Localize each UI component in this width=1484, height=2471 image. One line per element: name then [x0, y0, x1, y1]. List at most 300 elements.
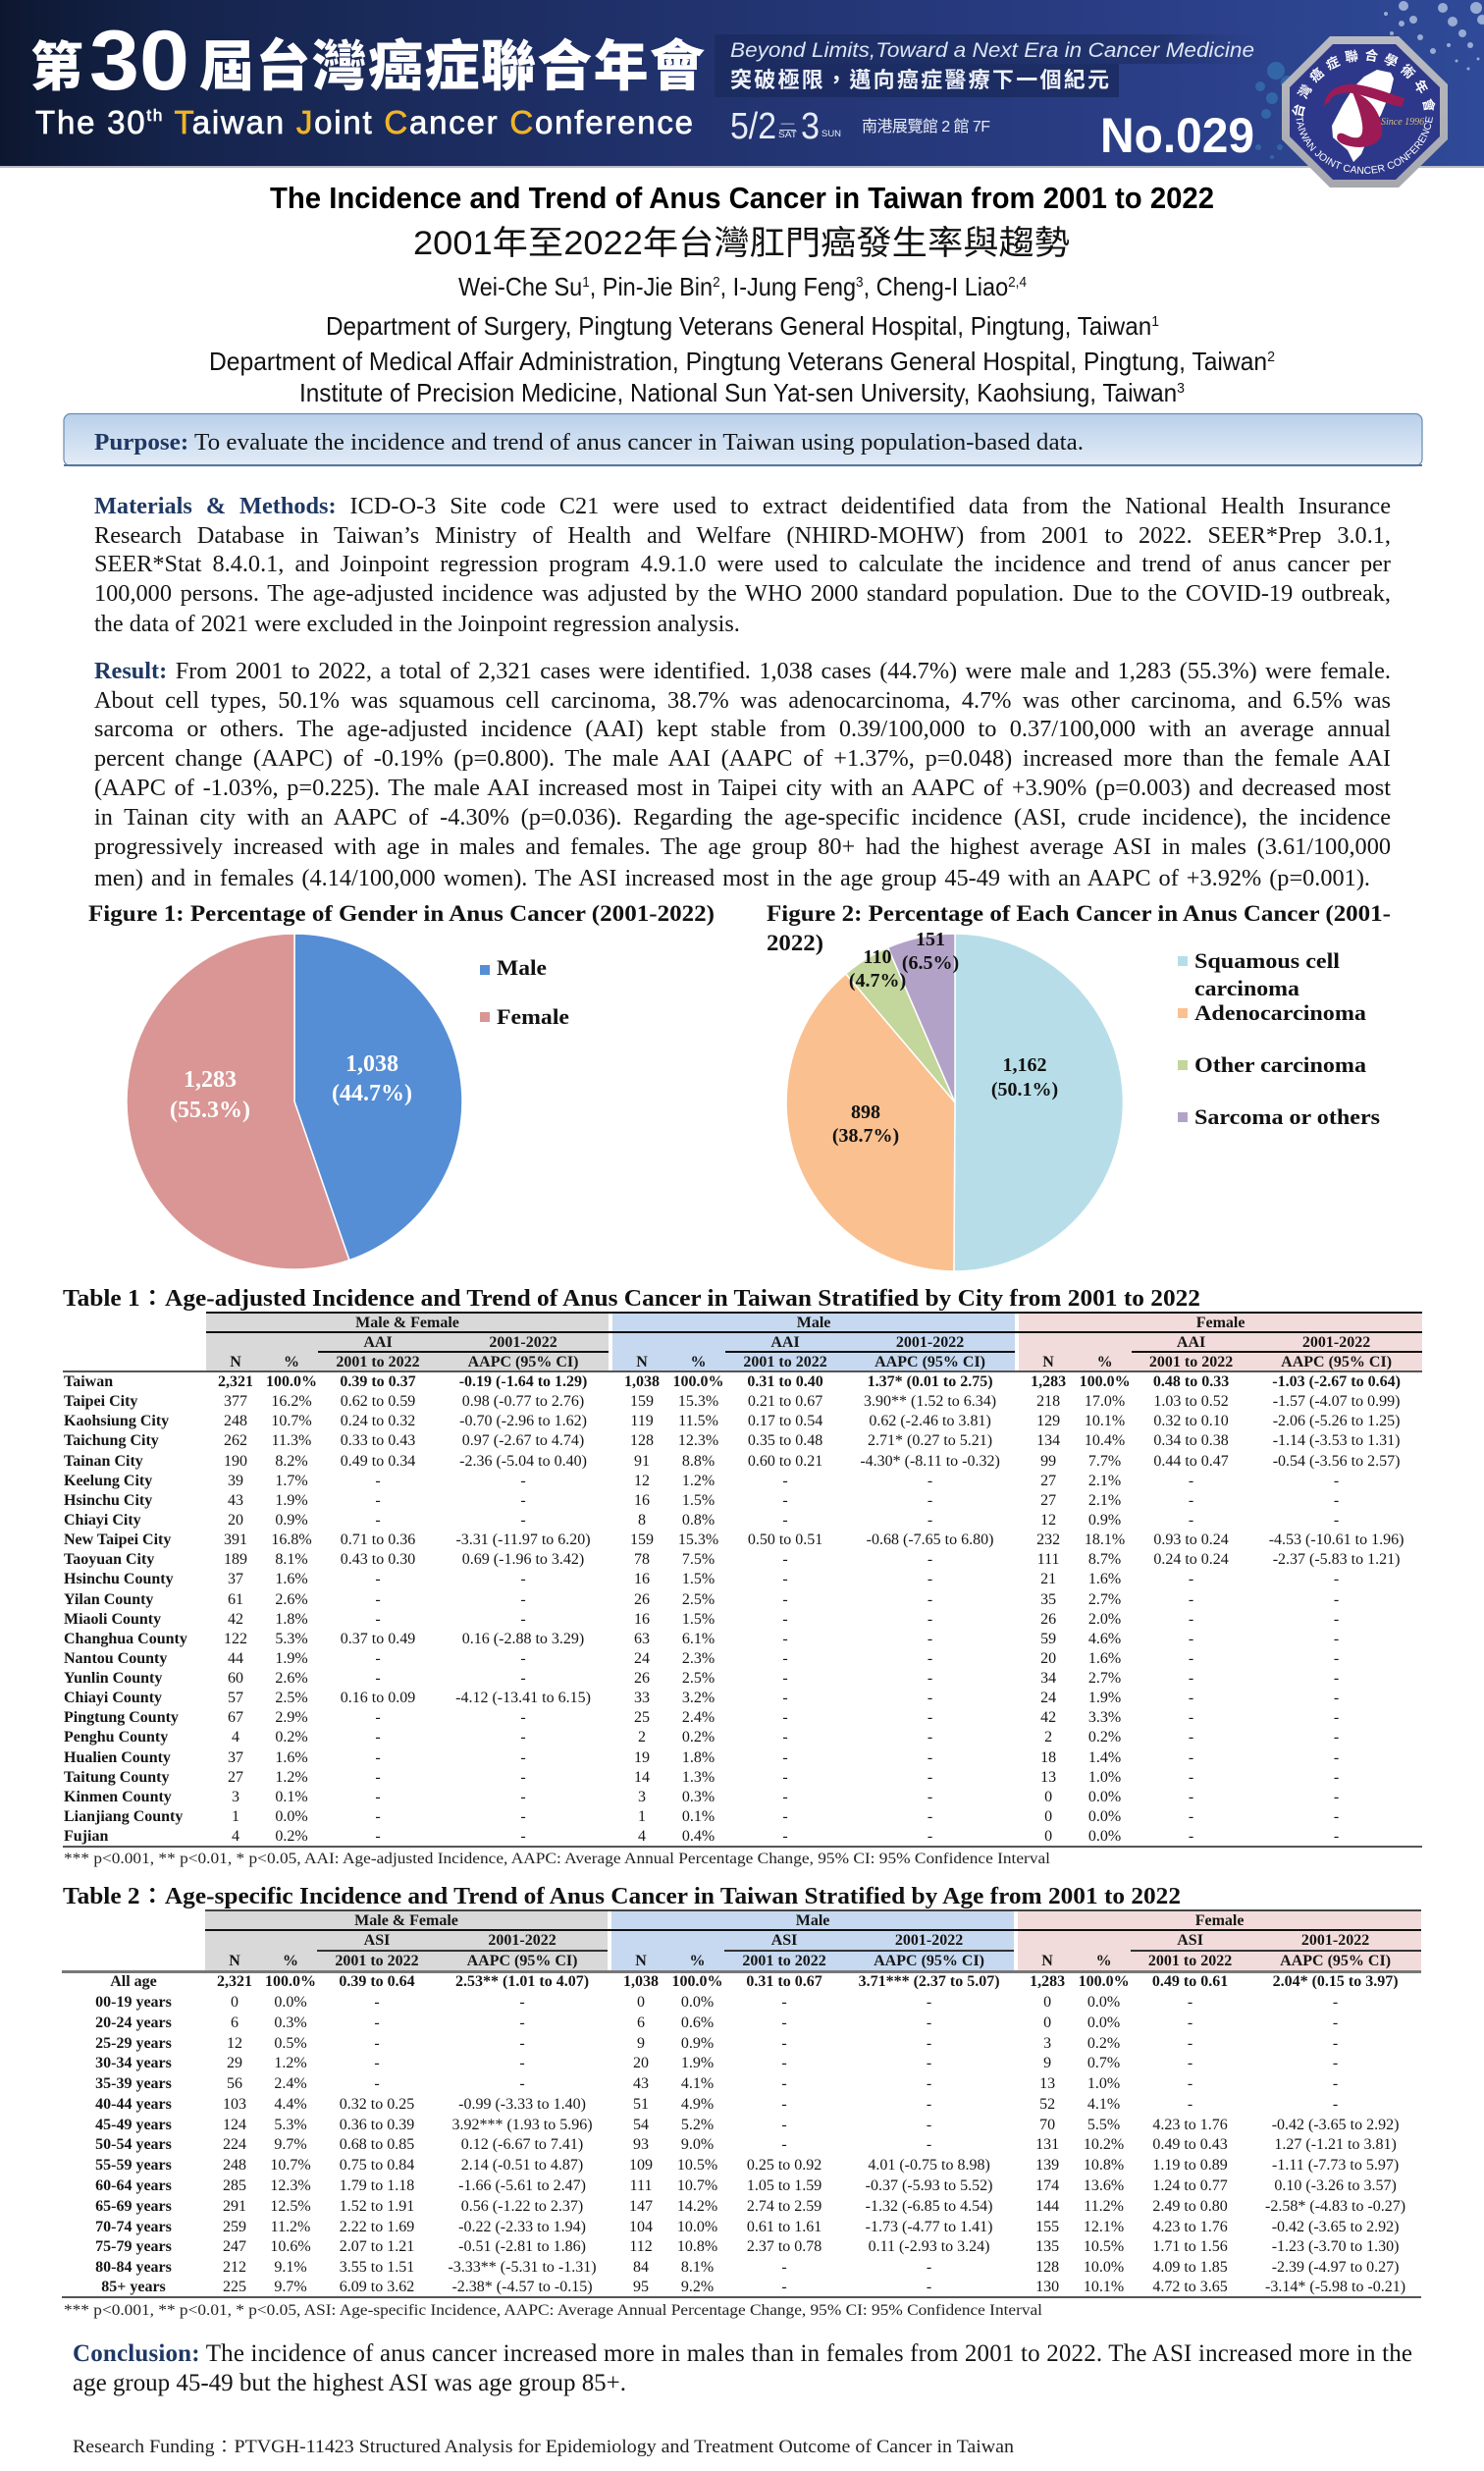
- table 2: age-specific incidence by age group: 13.6%: [1084, 2177, 1124, 2193]
- table 1: age-adjusted incidence by city: -: [1189, 1749, 1193, 1765]
- table 1: age-adjusted incidence by city: 0.9%: [275, 1512, 308, 1529]
- table 2: age-specific incidence by age group: 3.92*** (1.93 to 5.96): [451, 2117, 593, 2132]
- table 1: age-adjusted incidence by city: 61: [228, 1590, 243, 1608]
- table 2: age-specific incidence by age group: -: [1333, 2095, 1338, 2113]
- table 2: age-specific incidence by age group: -: [927, 2258, 931, 2276]
- table 1: age-adjusted incidence by city: 0.35 to 0.48: [748, 1432, 822, 1449]
- table 1: age-adjusted incidence by city: 1.9%: [275, 1650, 308, 1667]
- table 1: age-adjusted incidence by city: 1: [232, 1808, 239, 1825]
- text: in Tainan city with an AAPC of -4.30% (p=0.036). Regarding the age-specific incidence (ASI, crude incidence), the incidence: [94, 804, 1391, 831]
- table 1: age-adjusted incidence by city: -: [782, 1512, 788, 1529]
- table 1: age-adjusted incidence by city: 1.9%: [275, 1492, 308, 1509]
- legend: gender: [480, 955, 569, 1029]
- table 1: age-adjusted incidence by city: 1.5%: [682, 1571, 715, 1587]
- pie labels: cancer types: 898: [851, 1101, 880, 1123]
- table 1: age-adjusted incidence by city: -: [782, 1729, 788, 1746]
- table 2: age-specific incidence by age group: -0.42 (-3.65 to 2.92): [1272, 2219, 1399, 2234]
- heading: figure 1: Figure 1: Percentage of Gender in Anus Cancer (2001-2022): [88, 901, 715, 926]
- table 1: age-adjusted incidence by city: 1.6%: [1088, 1571, 1121, 1587]
- table 1: age-adjusted incidence by city: -: [1189, 1789, 1193, 1805]
- table 1: age-adjusted incidence by city: -: [520, 1808, 526, 1825]
- table 1: age-adjusted incidence by city: 16: [634, 1492, 650, 1509]
- legend: cancer types: [1178, 948, 1380, 1129]
- table 2: age-specific incidence by age group: 75-79 years: [95, 2238, 172, 2255]
- table 1: age-adjusted incidence by city: 8.8%: [682, 1453, 715, 1469]
- table 1: age-adjusted incidence by city: -: [520, 1611, 526, 1628]
- pie labels: cancer types: [832, 929, 1058, 1147]
- pie labels: cancer types: (4.7%): [849, 970, 906, 992]
- table 1: age-adjusted incidence by city: 2.9%: [275, 1709, 308, 1726]
- table 1: age-adjusted incidence by city: 1.5%: [682, 1611, 715, 1628]
- pie labels: cancer types: 151: [916, 929, 945, 950]
- table 1: age-adjusted incidence by city: 7.7%: [1088, 1453, 1121, 1469]
- table 1: age-adjusted incidence by city: 0.1%: [275, 1789, 308, 1805]
- table 1: age-adjusted incidence by city: -: [375, 1789, 381, 1805]
- conclusion: [73, 2340, 1412, 2396]
- table 2: age-specific incidence by age group: -: [1333, 1993, 1338, 2011]
- table 1: age-adjusted incidence by city: -: [782, 1631, 788, 1647]
- table 1: age-adjusted incidence by city: -: [782, 1749, 788, 1765]
- table 2: age-specific incidence by age group: 291: [223, 2197, 246, 2215]
- table 1: age-adjusted incidence by city: Kinmen County: [64, 1789, 172, 1805]
- table 1: age-adjusted incidence by city: Taipei City: [64, 1393, 137, 1410]
- table 1: age-adjusted incidence by city: Nantou County: [64, 1650, 167, 1667]
- table 2: age-specific incidence by age group: 8.1%: [681, 2258, 714, 2276]
- table 1: age-adjusted incidence by city: -: [1334, 1670, 1339, 1687]
- table 1: age-adjusted incidence by city: -: [1334, 1789, 1339, 1805]
- logo: Taiwan Joint Cancer Conference emblem: Since 1996: [1381, 117, 1424, 128]
- table 1: age-adjusted incidence by city: 4: [232, 1729, 239, 1746]
- text: Materials & Methods: ICD-O-3 Site code C21 were used to extract deidentified data from the National Health Insurance: [94, 493, 1391, 519]
- table 1: age-adjusted incidence by city: 2.4%: [682, 1709, 715, 1726]
- table 2: age-specific incidence by age group: -2.39 (-4.97 to 0.27): [1272, 2258, 1399, 2276]
- table 2: age-specific incidence by age group: 2.22 to 1.69: [340, 2219, 414, 2234]
- table 2: age-specific incidence by age group: 5.5%: [1087, 2117, 1120, 2132]
- table 2: age-specific incidence by age group: 135: [1035, 2238, 1059, 2255]
- table 1: age-adjusted incidence by city: 122: [224, 1631, 247, 1647]
- table 2: age-specific incidence by age group: 9.2%: [681, 2279, 714, 2295]
- table 2: age-specific incidence by age group: 95: [633, 2279, 649, 2295]
- table 1: age-adjusted incidence by city: 33: [634, 1690, 650, 1706]
- table 1: age-adjusted incidence by city: -: [928, 1551, 932, 1568]
- table 1: age-adjusted incidence by city: -: [1189, 1590, 1193, 1608]
- pie labels: gender: (44.7%): [332, 1081, 412, 1106]
- date and venue: 3: [801, 106, 820, 147]
- table 1: age-adjusted incidence by city: 0.0%: [1088, 1828, 1121, 1845]
- table 1: age-adjusted incidence by city: 10.1%: [1085, 1413, 1125, 1429]
- table 1: age-adjusted incidence by city: -: [782, 1670, 788, 1687]
- slogan box: 突破極限，邁向癌症醫療下一個紀元: [730, 68, 1109, 92]
- table 1: age-adjusted incidence by city: 17.0%: [1085, 1393, 1125, 1410]
- table 1: age-adjusted incidence by city: Taiwan: [64, 1372, 113, 1390]
- table 2: age-specific incidence by age group: 10.2%: [1084, 2136, 1124, 2153]
- table 1: age-adjusted incidence by city: 2,321: [218, 1372, 253, 1390]
- table 2: age-specific incidence by age group: -: [1188, 2055, 1192, 2071]
- table 2: age-specific incidence by age group: 0.25 to 0.92: [747, 2156, 822, 2174]
- table 2: age-specific incidence by age group: 131: [1035, 2136, 1059, 2153]
- table 1: age-adjusted incidence by city: -: [520, 1590, 526, 1608]
- table 2: age-specific incidence by age group: -: [781, 2117, 787, 2132]
- table 2: age-specific incidence by age group: 128: [1035, 2258, 1059, 2276]
- table 2: age-specific incidence by age group: 5.3%: [274, 2117, 307, 2132]
- table 1: age-adjusted incidence by city: 16: [634, 1571, 650, 1587]
- table 1: age-adjusted incidence by city: -: [375, 1670, 381, 1687]
- table 1: age-adjusted incidence by city: %: [1097, 1353, 1113, 1370]
- table 1: age-adjusted incidence by city: Pingtung County: [64, 1709, 179, 1726]
- table 1: age-adjusted incidence by city: Taoyuan City: [64, 1551, 154, 1568]
- table 1: age-adjusted incidence by city: -: [520, 1729, 526, 1746]
- table 1: age-adjusted incidence by city: 2.1%: [1088, 1492, 1121, 1509]
- table 2: age-specific incidence by age group: -: [519, 2075, 525, 2091]
- table 1: age-adjusted incidence by city: -4.30* (-8.11 to -0.32): [860, 1453, 1000, 1469]
- table 1: age-adjusted incidence by city: 12: [634, 1473, 650, 1489]
- table 1: age-adjusted incidence by city: -: [375, 1729, 381, 1746]
- table 1: age-adjusted incidence by city: -: [520, 1473, 526, 1489]
- table 1: age-adjusted incidence by city: -: [375, 1828, 381, 1845]
- pie chart: cancer types: [786, 934, 1123, 1271]
- table 2: age-specific incidence by age group: 0.61 to 1.61: [747, 2219, 822, 2234]
- logo: Taiwan Joint Cancer Conference emblem: [1282, 36, 1448, 188]
- table 2: age-specific incidence by age group: -: [374, 2075, 380, 2091]
- table 2: age-specific incidence by age group: -: [927, 2055, 931, 2071]
- table 2: age-specific incidence by age group: 1,283: [1030, 1973, 1065, 1989]
- table 1: age-adjusted incidence by city: 2.7%: [1088, 1590, 1121, 1608]
- table 1: age-adjusted incidence by city: 0.2%: [275, 1729, 308, 1746]
- table 1: age-adjusted incidence by city: 24: [1040, 1690, 1056, 1706]
- table 1: age-adjusted incidence by city: 2.1%: [1088, 1473, 1121, 1489]
- table 1: age-adjusted incidence by city: -: [375, 1512, 381, 1529]
- table 2: age-specific incidence by age group: 2.07 to 1.21: [340, 2238, 414, 2255]
- table 2: age-specific incidence by age group: -: [519, 2014, 525, 2030]
- table 2: age-specific incidence by age group: 0.75 to 0.84: [340, 2156, 414, 2174]
- table 2: age-specific incidence by age group: 0.32 to 0.25: [340, 2095, 414, 2113]
- table 1: age-adjusted incidence by city: -: [520, 1769, 526, 1786]
- logo: Taiwan Joint Cancer Conference emblem: TAIWAN JOINT CANCER CONFERENCE: [1296, 116, 1433, 175]
- table 1: age-adjusted incidence by city: -: [782, 1789, 788, 1805]
- table 1: age-adjusted incidence by city: 1,038: [624, 1372, 660, 1390]
- table 1: age-adjusted incidence by city: 35: [1040, 1590, 1056, 1608]
- table 2: age-specific incidence by age group: 50-54 years: [95, 2136, 172, 2153]
- table 2: age-specific incidence by age group: 11.2%: [1084, 2197, 1124, 2215]
- table 2: age-specific incidence by age group: -: [781, 1993, 787, 2011]
- table 1: age-adjusted incidence by city: -: [782, 1769, 788, 1786]
- table 2: age-specific incidence by age group: 10.7%: [270, 2156, 311, 2174]
- legend: gender: Female: [497, 1004, 569, 1029]
- table 1: age-adjusted incidence by city: -: [1334, 1512, 1339, 1529]
- table 2: age-specific incidence by age group: 0.0%: [681, 1993, 714, 2011]
- table 2: age-specific incidence by age group: -: [1188, 2095, 1192, 2113]
- table 2: age-specific incidence by age group: 0: [1043, 1993, 1051, 2011]
- table 2: age-specific incidence by age group: 2001-2022: [1301, 1932, 1369, 1949]
- table 2: age-specific incidence by age group: 52: [1039, 2095, 1055, 2113]
- table 1: age-adjusted incidence by city: 0.32 to 0.10: [1153, 1413, 1229, 1429]
- table 2: age-specific incidence by age group: -: [1188, 2034, 1192, 2052]
- table 1: age-adjusted incidence by city: 43: [228, 1492, 243, 1509]
- footnote: table 1: *** p<0.001, ** p<0.01, * p<0.05, AAI: Age-adjusted Incidence, AAPC: Average Annual Percentage Change, 95% CI: 95% Confidence Interval: [64, 1851, 1051, 1867]
- legend: cancer types: Squamous cell: [1194, 948, 1340, 973]
- table 1: age-adjusted incidence by city: Tainan City: [64, 1453, 143, 1469]
- table 1: age-adjusted incidence by city: 2.6%: [275, 1670, 308, 1687]
- table 1: age-adjusted incidence by city: Hsinchu City: [64, 1492, 152, 1509]
- table 1: age-adjusted incidence by city: Chiayi City: [64, 1512, 141, 1529]
- table 1: age-adjusted incidence by city: 4: [232, 1828, 239, 1845]
- table 1: age-adjusted incidence by city: -: [375, 1590, 381, 1608]
- table 1: age-adjusted incidence by city: -: [375, 1492, 381, 1509]
- table 1: age-adjusted incidence by city: 2: [638, 1729, 646, 1746]
- text: percent change (AAPC) of -0.19% (p=0.800). The male AAI (AAPC of +1.37%, p=0.048) increased more than the female AAI: [94, 745, 1391, 772]
- table 1: age-adjusted incidence by city: -: [1334, 1571, 1339, 1587]
- pie labels: cancer types: 110: [864, 946, 891, 968]
- table 1: age-adjusted incidence by city: 2.3%: [682, 1650, 715, 1667]
- footnote: table 2: *** p<0.001, ** p<0.01, * p<0.05, ASI: Age-specific Incidence, AAPC: Average Annual Percentage Change, 95% CI: 95% Confidence Interval: [64, 2302, 1043, 2319]
- poster number: No.029: [1100, 108, 1254, 163]
- Chinese conference title: 屆台灣癌症聯合年會: [199, 35, 705, 97]
- affiliations: 3: [1177, 380, 1185, 397]
- table 1: age-adjusted incidence by city: 12.3%: [678, 1432, 718, 1449]
- table 2: age-specific incidence by age group: 2001-2022: [488, 1932, 556, 1949]
- table 1: age-adjusted incidence by city: 2.71* (0.27 to 5.21): [868, 1432, 992, 1449]
- table 2: age-specific incidence by age group: 12.5%: [270, 2197, 311, 2215]
- table 1: age-adjusted incidence by city: -: [928, 1512, 932, 1529]
- table 1: age-adjusted incidence by city: Taichung City: [64, 1432, 159, 1449]
- table 1: age-adjusted incidence by city: 1.6%: [275, 1749, 308, 1765]
- table 2: age-specific incidence by age group: 224: [223, 2136, 246, 2153]
- table 1: age-adjusted incidence by city: 37: [228, 1571, 243, 1587]
- table 1: age-adjusted incidence by city: -1.14 (-3.53 to 1.31): [1273, 1432, 1400, 1449]
- table 2: age-specific incidence by age group: 10.8%: [1084, 2156, 1124, 2174]
- text block: materials and methods: [94, 493, 1391, 637]
- legend: cancer types: carcinoma: [1194, 976, 1299, 1000]
- table 1: age-adjusted incidence by city: 1.9%: [1088, 1690, 1121, 1706]
- table 1: age-adjusted incidence by city: -: [520, 1749, 526, 1765]
- text: progressively increased with age in males and females. The age group 80+ had the highest average ASI in males (3.61/100,000: [94, 833, 1391, 860]
- table 2: age-specific incidence by age group: 9.7%: [274, 2136, 307, 2153]
- table 1: age-adjusted incidence by city: -4.53 (-10.61 to 1.96): [1269, 1531, 1404, 1548]
- table 2: age-specific incidence by age group: 4.1%: [1087, 2095, 1120, 2113]
- table 2: age-specific incidence by age group: -: [781, 2279, 787, 2295]
- table 2: age-specific incidence by age group: 2.4%: [274, 2075, 307, 2091]
- table 1: age-adjusted incidence by city: 0.71 to 0.36: [341, 1531, 415, 1548]
- table 2: age-specific incidence by age group: 0: [1043, 2014, 1051, 2030]
- table 2: age-specific incidence by age group: 10.1%: [1084, 2279, 1124, 2295]
- table 1: age-adjusted incidence by city: -3.31 (-11.97 to 6.20): [455, 1531, 591, 1548]
- table 1: age-adjusted incidence by city: 1.6%: [275, 1571, 308, 1587]
- legend: cancer types: Adenocarcinoma: [1194, 1000, 1366, 1025]
- table 1: age-adjusted incidence by city: 3: [232, 1789, 239, 1805]
- table 2: age-specific incidence by age group: -: [1333, 2055, 1338, 2071]
- table 1: age-adjusted incidence by city: -: [1189, 1690, 1193, 1706]
- table 1: age-adjusted incidence by city: -1.57 (-4.07 to 0.99): [1273, 1393, 1400, 1410]
- table 1: age-adjusted incidence by city: 100.0%: [1080, 1372, 1131, 1390]
- table 1: age-adjusted incidence by city: 2001 to 2022: [1149, 1353, 1233, 1370]
- table 2: age-specific incidence by age group: 65-69 years: [95, 2197, 172, 2215]
- authors: Wei-Che Su: [458, 272, 596, 301]
- table 1: age-adjusted incidence by city: -: [375, 1650, 381, 1667]
- text block: result: [94, 658, 1391, 891]
- table 2: age-specific incidence by age group: 56: [227, 2075, 242, 2091]
- table 2: age-specific incidence by age group: 285: [223, 2177, 246, 2193]
- table 1: age-adjusted incidence by city: 0.39 to 0.37: [340, 1372, 416, 1390]
- table 2: age-specific incidence by age group: 247: [223, 2238, 246, 2255]
- table 1: age-adjusted incidence by city: Chiayi County: [64, 1690, 162, 1706]
- table 1: age-adjusted incidence by city: -: [928, 1709, 932, 1726]
- table 2: age-specific incidence by age group: 1.71 to 1.56: [1152, 2238, 1228, 2255]
- table 2: age-specific incidence by age group: 29: [227, 2055, 242, 2071]
- table 1: age-adjusted incidence by city: -: [1334, 1828, 1339, 1845]
- table 1: age-adjusted incidence by city: -: [375, 1749, 381, 1765]
- table 2: age-specific incidence by age group: 2001 to 2022: [1148, 1953, 1232, 1969]
- table 2: age-specific incidence by age group: -2.58* (-4.83 to -0.27): [1265, 2197, 1405, 2215]
- pie labels: gender: 1,283: [184, 1067, 237, 1093]
- heading: table 2: Table 2：Age-specific Incidence and Trend of Anus Cancer in Taiwan Stratified by Age from 2001 to 2022: [63, 1884, 1181, 1909]
- table 1: age-adjusted incidence by city: 3: [638, 1789, 646, 1805]
- table 1: age-adjusted incidence by city: 2001-2022: [489, 1333, 557, 1351]
- table 1: age-adjusted incidence by city: Kaohsiung City: [64, 1413, 169, 1429]
- table 2: age-specific incidence by age group: 0.31 to 0.67: [746, 1973, 822, 1989]
- table 1: age-adjusted incidence by city: 0.31 to 0.40: [747, 1372, 823, 1390]
- table 2: age-specific incidence by age group: -2.38* (-4.57 to -0.15): [451, 2279, 593, 2295]
- table 2: age-specific incidence by age group: 4.23 to 1.76: [1152, 2219, 1228, 2234]
- table 1: age-adjusted incidence by city: 2.5%: [682, 1590, 715, 1608]
- slogan box: Beyond Limits,Toward a Next Era in Cancer Medicine: [730, 39, 1254, 62]
- table 2: age-specific incidence by age group: 1.52 to 1.91: [340, 2197, 414, 2215]
- table 2: age-specific incidence by age group: 80-84 years: [95, 2258, 172, 2276]
- table 1: age-adjusted incidence by city: AAPC (95% CI): [1281, 1353, 1392, 1370]
- table 2: age-specific incidence by age group: AAPC (95% CI): [1280, 1953, 1391, 1969]
- table 2: age-specific incidence by age group: -1.23 (-3.70 to 1.30): [1272, 2238, 1399, 2255]
- table 1: age-adjusted incidence by city: 8.1%: [275, 1551, 308, 1568]
- table 1: age-adjusted incidence by city: 20: [1040, 1650, 1056, 1667]
- table 1: age-adjusted incidence by city: 0.93 to 0.24: [1153, 1531, 1229, 1548]
- table 1: age-adjusted incidence by city: 0.8%: [682, 1512, 715, 1529]
- table 1: age-adjusted incidence by city: -: [520, 1492, 526, 1509]
- table 1: age-adjusted incidence by city: 63: [634, 1631, 650, 1647]
- table 2: age-specific incidence by age group: 0.39 to 0.64: [339, 1973, 415, 1989]
- table 2: age-specific incidence by age group: 14.2%: [677, 2197, 717, 2215]
- table 1: age-adjusted incidence by city: 159: [630, 1393, 654, 1410]
- pie labels: cancer types: (6.5%): [902, 952, 959, 974]
- table 1: age-adjusted incidence by city: 232: [1036, 1531, 1060, 1548]
- title block: [209, 181, 1275, 407]
- table 2: age-specific incidence by age group: 10.8%: [677, 2238, 717, 2255]
- Chinese conference title: 第: [30, 38, 83, 97]
- table 1: age-adjusted incidence by city: AAI: [363, 1333, 393, 1351]
- table 1: age-adjusted incidence by city: 1.8%: [682, 1749, 715, 1765]
- table 1: age-adjusted incidence by city: 0.60 to 0.21: [748, 1453, 822, 1469]
- table 1: age-adjusted incidence by city: -: [375, 1808, 381, 1825]
- table 1: age-adjusted incidence by city: 44: [228, 1650, 243, 1667]
- table 2: age-specific incidence by age group: 0.9%: [681, 2034, 714, 2052]
- table 1: age-adjusted incidence by city: 0.9%: [1088, 1512, 1121, 1529]
- table 1: age-adjusted incidence by city: -2.36 (-5.04 to 0.40): [459, 1453, 587, 1469]
- table 2: age-specific incidence by age group: 0.10 (-3.26 to 3.57): [1274, 2177, 1397, 2193]
- table 2: age-specific incidence by age group: 12.3%: [270, 2177, 311, 2193]
- table 1: age-adjusted incidence by city: Changhua County: [64, 1631, 187, 1647]
- table 1: age-adjusted incidence by city: -: [928, 1650, 932, 1667]
- table 1: age-adjusted incidence by city: Penghu County: [64, 1729, 168, 1746]
- table 1: age-adjusted incidence by city: 0.16 (-2.88 to 3.29): [462, 1631, 584, 1647]
- table 2: age-specific incidence by age group: -1.66 (-5.61 to 2.47): [458, 2177, 586, 2193]
- table 1: age-adjusted incidence by city: -0.54 (-3.56 to 2.57): [1273, 1453, 1400, 1469]
- table 1: age-adjusted incidence by city: 0.17 to 0.54: [748, 1413, 822, 1429]
- date and venue: 二: [778, 123, 797, 134]
- heading: table 1: Table 1：Age-adjusted Incidence and Trend of Anus Cancer in Taiwan Stratified by City from 2001 to 2022: [63, 1286, 1200, 1312]
- logo: Taiwan Joint Cancer Conference emblem: 台灣癌症聯合學術年會: [1292, 49, 1435, 116]
- table 1: age-adjusted incidence by city: 11.5%: [678, 1413, 718, 1429]
- text: men) and in females (4.14/100,000 women). The ASI increased most in the age group 45-49 with an AAPC of +3.92% (p=0.001).: [94, 865, 1370, 891]
- table 1: age-adjusted incidence by city: 0.49 to 0.34: [341, 1453, 415, 1469]
- table 2: age-specific incidence by age group: 9.1%: [274, 2258, 307, 2276]
- table 1: age-adjusted incidence by city: -0.68 (-7.65 to 6.80): [867, 1531, 993, 1548]
- table 2: age-specific incidence by age group: 10.7%: [677, 2177, 717, 2193]
- affiliations: [209, 311, 1275, 407]
- table 1: age-adjusted incidence by city: Taitung County: [64, 1769, 169, 1786]
- table 1: age-adjusted incidence by city: 3.2%: [682, 1690, 715, 1706]
- table 2: age-specific incidence by age group: 2001 to 2022: [742, 1953, 826, 1969]
- text: Research Database in Taiwan’s Ministry of Health and Welfare (NHIRD-MOHW) from 2001 to 2022. SEER*Prep 3.0.1,: [94, 522, 1391, 549]
- table 2: age-specific incidence by age group: 212: [223, 2258, 246, 2276]
- table 1: age-adjusted incidence by city: -: [1189, 1650, 1193, 1667]
- table 2: age-specific incidence by age group: N: [635, 1953, 647, 1969]
- table 2: age-specific incidence by age group: 93: [633, 2136, 649, 2153]
- table 2: age-specific incidence by age group: -: [781, 2258, 787, 2276]
- table 1: age-adjusted incidence by city: 27: [1040, 1492, 1056, 1509]
- table 1: age-adjusted incidence by city: 1.0%: [1088, 1769, 1121, 1786]
- table 1: age-adjusted incidence by city: -: [1189, 1611, 1193, 1628]
- table 1: age-adjusted incidence by city: 100.0%: [673, 1372, 724, 1390]
- table 2: age-specific incidence by age group: 11.2%: [271, 2219, 310, 2234]
- table 1: age-adjusted incidence by city: 0.98 (-0.77 to 2.76): [462, 1393, 584, 1410]
- table 1: age-adjusted incidence by city: %: [691, 1353, 707, 1370]
- table 1: age-adjusted incidence by city: -: [520, 1670, 526, 1687]
- table 1: age-adjusted incidence by city: -: [782, 1611, 788, 1628]
- table 2: age-specific incidence by age group: 10.5%: [1084, 2238, 1124, 2255]
- table 1: age-adjusted incidence by city: -: [520, 1828, 526, 1845]
- table 2: age-specific incidence by age group: 100.0%: [265, 1973, 316, 1989]
- table 1: age-adjusted incidence by city: N: [636, 1353, 648, 1370]
- table 1: age-adjusted incidence by city: 15.3%: [678, 1531, 718, 1548]
- Chinese conference title: 30: [89, 14, 189, 108]
- table 2: age-specific incidence by age group: 00-19 years: [95, 1993, 172, 2011]
- authors: 2,4: [1008, 274, 1027, 291]
- table 2: age-specific incidence by age group: %: [283, 1953, 298, 1969]
- table 1: age-adjusted incidence by city: -: [928, 1473, 932, 1489]
- table 1: age-adjusted incidence by city: Lianjiang County: [64, 1808, 183, 1825]
- table 2: age-specific incidence by age group: -3.14* (-5.98 to -0.21): [1265, 2279, 1405, 2295]
- table 1: age-adjusted incidence by city: -: [928, 1492, 932, 1509]
- table 1: age-adjusted incidence by city: 59: [1040, 1631, 1056, 1647]
- table 2: age-specific incidence by age group: N: [1041, 1953, 1053, 1969]
- table 1: age-adjusted incidence by city: -: [1189, 1492, 1193, 1509]
- table 1: age-adjusted incidence by city: 0.0%: [1088, 1789, 1121, 1805]
- table 1: age-adjusted incidence by city: 2.0%: [1088, 1611, 1121, 1628]
- table 2: age-specific incidence by age group: -: [781, 2034, 787, 2052]
- table 1: age-adjusted incidence by city: 0.37 to 0.49: [341, 1631, 415, 1647]
- table 1: age-adjusted incidence by city: 2001 to 2022: [743, 1353, 827, 1370]
- table 2: age-specific incidence by age group: -: [374, 2034, 380, 2052]
- table 1: age-adjusted incidence by city: 6.1%: [682, 1631, 715, 1647]
- table 1: age-adjusted incidence by city: 0.34 to 0.38: [1153, 1432, 1229, 1449]
- pie labels: gender: [170, 1051, 412, 1123]
- table 1: age-adjusted incidence by city: 0.2%: [682, 1729, 715, 1746]
- table 2: age-specific incidence by age group: 10.0%: [1084, 2258, 1124, 2276]
- table 1: age-adjusted incidence by city: 0.21 to 0.67: [748, 1393, 822, 1410]
- table 1: age-adjusted incidence by city: 0.16 to 0.09: [341, 1690, 415, 1706]
- table 1: age-adjusted incidence by city: 26: [1040, 1611, 1056, 1628]
- table 2: age-specific incidence by age group: 0.6%: [681, 2014, 714, 2030]
- table 1: age-adjusted incidence by city: -: [928, 1769, 932, 1786]
- table 1: age-adjusted incidence by city: -: [928, 1571, 932, 1587]
